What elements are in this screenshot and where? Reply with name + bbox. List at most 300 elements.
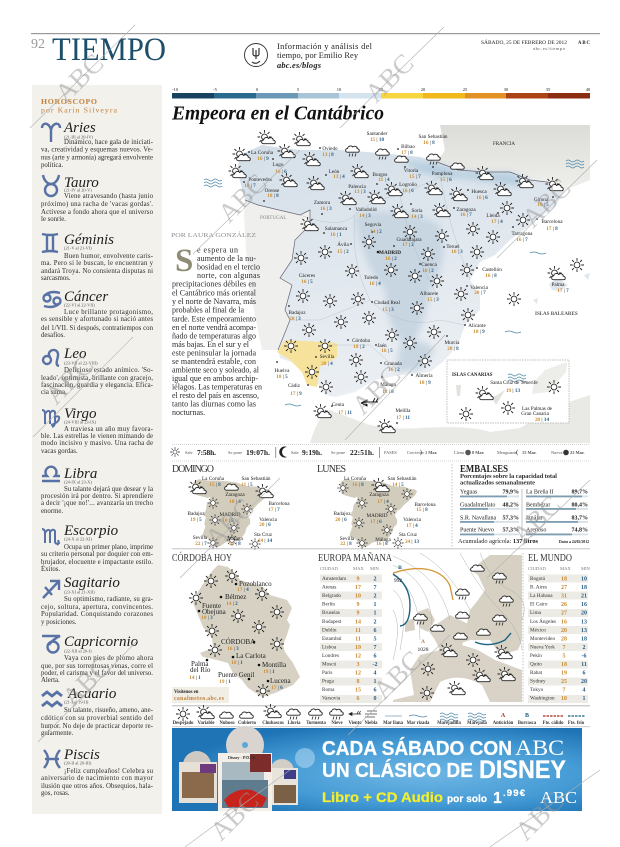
reservoir values: 57,3% — [502, 528, 519, 534]
watermarks: ABC: ABC — [346, 360, 407, 420]
table: world cities: Rabat — [530, 670, 543, 676]
panel: Sunday forecast: 21 | 8 — [229, 541, 241, 547]
sign: Virgo: vacas gordas. — [41, 448, 78, 455]
white sea cuts — [430, 678, 490, 702]
panel: Sunday forecast: DOMINGO — [172, 464, 214, 475]
sun, moon and phases strip: 9:19h. — [302, 448, 322, 457]
city labels and temperatures: Girona — [534, 197, 549, 203]
sign: Escorpio: brujador, elocuente e impactante estilo. — [41, 559, 153, 566]
sign: Leo — [41, 346, 154, 396]
reservoir values: Bembézar — [526, 502, 550, 508]
advertisement: Disney — [172, 726, 582, 811]
reservoir values: 48,2% — [502, 502, 519, 508]
sign: Sagitario: Popularidad. Conquistando corazones — [41, 611, 153, 618]
town labels: 16 | 3 — [227, 646, 239, 652]
city labels and temperatures: 16 | 2 — [422, 268, 434, 274]
city labels and temperatures: 20 | 7 — [474, 290, 486, 296]
legend — [173, 704, 585, 726]
temperature scale: -5 — [213, 87, 218, 92]
city labels and temperatures: Ceuta — [332, 402, 345, 408]
ad headline line 1: CADA SÁBADO CON — [322, 737, 512, 760]
borders — [245, 200, 310, 350]
sun, moon and phases strip: 22 Mar. — [570, 450, 584, 455]
legend labels: Cubierto — [238, 721, 257, 726]
sign: Escorpio — [41, 523, 154, 573]
temperature scale: 0 — [256, 87, 259, 92]
city labels and temperatures: 18 | 8 — [382, 389, 394, 395]
city labels and temperatures: 16 | 6 — [402, 188, 414, 194]
panel: Monday forecast: Sevilla — [340, 536, 355, 542]
sign: Libra: Su talante dejará que desear y la — [64, 486, 153, 493]
panel: Monday forecast: Zaragoza — [369, 492, 389, 498]
reservoir values: Arenoso — [526, 528, 546, 534]
table: Europe cities: Berlín — [322, 602, 335, 608]
city labels and temperatures: 14 | 3 — [359, 213, 371, 219]
panel: Córdoba today — [172, 552, 300, 703]
sign: Escorpio: (24-X al 22-XI) — [64, 536, 92, 542]
table: world cities: Bogotá — [530, 576, 546, 582]
islands: Baleares — [533, 273, 590, 304]
table: Europe cities: 10 — [355, 594, 361, 600]
arrow: wind — [361, 398, 378, 406]
table: world cities: 5 — [562, 654, 566, 660]
sign: Tauro: (21-IV al 20-V) — [64, 188, 92, 192]
callout: canalmeteo: Visítenos en — [174, 690, 199, 695]
sign: Aries: (21-III al 20-IV) — [64, 134, 94, 140]
city labels and temperatures: 15 | 3 — [382, 307, 394, 313]
sign: Libra — [41, 466, 154, 515]
sign: Cáncer: (22-VI al 22-VII) — [64, 302, 95, 308]
article text: el Cantábrico más oriental — [172, 288, 257, 298]
legend labels: Marejadilla — [437, 721, 461, 726]
title: TIEMPO — [52, 32, 166, 68]
article text: el resto del país en ascenso, — [172, 391, 259, 400]
table: world cities: -6 — [582, 654, 586, 660]
table: Europe cities: 12 — [355, 654, 361, 660]
table: Europe cities: MAX — [353, 566, 364, 571]
sign: Libra: Libra — [63, 466, 97, 482]
sign: Aries: Aries — [63, 120, 96, 136]
table: Europe cities: 5 — [374, 636, 376, 642]
table: Europe cities: Bruselas — [322, 610, 340, 616]
sign: Tauro: le sonríe. — [41, 216, 66, 223]
city labels and temperatures: Córdoba — [352, 338, 371, 344]
table: Europe cities: 14 — [355, 620, 361, 626]
sign: Acuario: Su talante, risueño, ameno, ane- — [64, 707, 154, 714]
table: Europe cities: Amsterdam — [322, 576, 346, 582]
sign: Virgo: modo incisivo y masivo. Una racha de — [41, 440, 153, 447]
map: Spain Sunday — [193, 479, 270, 547]
watermarks: ABC: ABC — [516, 173, 577, 233]
table: Europe cities: Budapest — [322, 619, 342, 625]
article text: se mantendrá estable, con — [172, 357, 256, 366]
table: world cities: El Cairo — [530, 602, 548, 608]
ad offer line: .99€ — [503, 788, 526, 799]
city labels and temperatures: Pamplona — [432, 171, 453, 177]
sign: Tauro: próximo) una racha de 'vacas gordas'. — [41, 201, 153, 208]
article text: tanto las diurnas como las — [172, 400, 256, 408]
panel: Sunday forecast: La Coruña — [202, 476, 225, 482]
date line: abc.es/tiempo — [533, 46, 566, 51]
sign: Capricornio: Capricornio — [64, 634, 139, 650]
sign: Piscis: ¡Feliz cumpleaños! Celebra su — [64, 768, 154, 775]
sign: Géminis: sarcasmos. — [41, 275, 71, 282]
cold fronts — [393, 574, 511, 645]
blog promo text: Información y análisis del — [277, 42, 373, 51]
table: Europe cities: 19 — [355, 645, 361, 651]
sign: Capricornio — [41, 634, 153, 684]
ad offer line: ABC — [540, 788, 577, 807]
table: world cities: 27 — [561, 610, 567, 616]
town labels: Palma — [191, 660, 209, 668]
table: world cities: 1 — [582, 696, 586, 702]
legend labels: Anticiclón — [493, 721, 514, 726]
city labels and temperatures: 16 | 3 — [451, 249, 463, 255]
sign: Acuario: Acuario — [67, 686, 117, 702]
city labels and temperatures: 15 | 2 — [337, 249, 349, 255]
table: world cities: México — [530, 628, 546, 634]
city labels and temperatures: Málaga — [380, 382, 396, 388]
city labels and temperatures: 16 | 6 — [275, 169, 287, 175]
table: world cities: Tokyo — [530, 687, 544, 693]
panel: world cities — [523, 553, 591, 703]
panel: Monday forecast: MADRID — [366, 513, 388, 519]
table: world cities: 18 — [561, 662, 567, 668]
table: world cities: 20 — [581, 679, 587, 685]
accumulated note — [458, 538, 589, 545]
sign: Piscis — [41, 747, 154, 797]
table: world cities: 16 — [561, 620, 567, 626]
article text: norte, con algunas — [197, 271, 260, 280]
sign: Piscis: (20-II al 20-III) — [64, 760, 92, 766]
city labels and temperatures: Murcia — [445, 340, 460, 346]
table: Europe cities: 15 — [355, 688, 361, 694]
city labels and temperatures: 16 | 4 — [369, 281, 381, 287]
weather icons — [414, 565, 515, 700]
city labels and temperatures: 16 | 5 — [381, 348, 393, 354]
sign: Leo: cia suma. — [41, 389, 67, 396]
table: world cities: 20 — [581, 610, 587, 616]
town labels: Puente Genil — [218, 671, 254, 679]
watermarks: ABC: ABC — [506, 490, 567, 550]
panel: Europe tomorrow — [318, 552, 524, 703]
temperature scale: 5 — [297, 87, 300, 92]
city labels and temperatures: 19 | 13 — [506, 388, 520, 394]
city labels and temperatures: 15 | 3 — [427, 297, 439, 303]
legend labels: Viento — [348, 721, 362, 726]
article text: precipitaciones débiles en — [172, 280, 256, 288]
table: world cities: Nueva York — [530, 644, 555, 650]
table: world cities: 13 — [581, 620, 587, 626]
table: world cities: 6 — [582, 670, 586, 676]
table: world cities: B. Aires — [530, 584, 547, 590]
town labels: 19 | 1 — [263, 669, 275, 675]
sun, moon and phases strip: Menguante — [497, 450, 517, 455]
panel: horoscope — [32, 85, 162, 814]
city labels and temperatures: Sevilla — [320, 354, 335, 360]
ad offer line — [322, 788, 577, 807]
date line: SÁBADO, 25 DE FEBRERO DE 2012 — [481, 40, 568, 46]
reservoir values: Puente Nuevo — [460, 528, 494, 534]
city labels and temperatures: Teruel — [446, 244, 460, 250]
table: world cities: 13 — [581, 628, 587, 634]
table: Europe cities: Atenas — [322, 584, 336, 590]
city labels and temperatures: Albacete — [420, 291, 439, 297]
sun, moon and phases strip: 19:07h. — [246, 448, 270, 457]
ad headline line 2: DISNEY — [479, 756, 566, 784]
table: world cities: 7 — [562, 688, 566, 694]
sun, moon and phases strip: 15 Mar. — [522, 450, 536, 455]
panel: world cities: EL MUNDO — [528, 553, 572, 564]
panel: Monday forecast: La Coruña — [344, 476, 367, 482]
city labels and temperatures: 17 | 9 — [290, 391, 302, 397]
town labels: La Carlota — [236, 652, 267, 660]
panel: Sunday forecast: 24 | 14 — [258, 538, 272, 544]
label: France, Portugal, Baleares: PORTUGAL — [260, 216, 286, 221]
subtitle: actualizados semanalmente — [460, 480, 535, 486]
panel: Sunday forecast: 19 | 5 — [190, 517, 202, 523]
city labels and temperatures: 20 | 3 — [289, 316, 301, 322]
legend icons — [176, 704, 585, 721]
reservoir values: Yeguas — [460, 490, 478, 496]
sign: Tauro: Tauro — [64, 175, 99, 191]
label: France, Portugal, Baleares: FRANCIA — [493, 142, 515, 147]
city labels and temperatures: Cáceres — [299, 273, 315, 279]
article text: igual que en ambos archip- — [172, 374, 258, 383]
city labels and temperatures: 18 | 9 — [473, 329, 485, 335]
city labels and temperatures: 16 | 6 — [476, 195, 488, 201]
city labels and temperatures: MADRID — [379, 250, 401, 256]
panel: Monday forecast: 17 | 4 — [377, 499, 389, 505]
sign: Piscis: gos, rosas. — [41, 790, 70, 797]
temperature scale — [172, 87, 591, 98]
panel: Monday forecast: 14 | 5 — [392, 482, 404, 488]
sun, moon and phases strip: Se pone — [228, 450, 242, 455]
table: world cities: Washington — [530, 696, 555, 702]
table: world cities: 10 — [581, 576, 587, 582]
sign: Géminis: (21-V al 21-VI) — [64, 246, 92, 250]
watermarks: ABC: ABC — [39, 350, 100, 410]
table: Europe cities: 7 — [374, 585, 376, 591]
table: world cities: MIN — [581, 566, 591, 571]
sign: Libra: a decir '¡que no!'... avanzaría un trecho — [41, 500, 154, 507]
pressure labels: A — [421, 639, 425, 645]
temperature scale: -10 — [172, 87, 179, 92]
table: world cities: Los Ángeles — [530, 617, 556, 625]
icons: sun — [284, 201, 584, 421]
sign: Libra: enorme. — [41, 508, 63, 515]
sign: Aries: va, creatividad y esquemas nuevos. Ve- — [41, 146, 154, 154]
city labels and temperatures: 17 | 4 — [491, 219, 503, 225]
temperature scale: 25 — [463, 87, 468, 92]
city labels and temperatures: Segovia — [365, 222, 382, 228]
reservoir values — [460, 490, 588, 534]
town labels: Bélmez — [225, 593, 246, 601]
city labels and temperatures: Huelva — [275, 368, 290, 374]
table: Europe cities: Estambul — [322, 636, 342, 642]
article byline: POR LAURA GONZÁLEZ — [171, 231, 256, 239]
table: Europe cities: 6 — [374, 688, 376, 694]
bars — [460, 489, 588, 537]
panel: Sunday forecast: Barcelona — [268, 501, 290, 507]
panel: Monday forecast: 22 | 8 — [340, 541, 352, 547]
table: Europe cities: 9 — [356, 602, 360, 608]
table: world cities: 28 — [561, 636, 567, 642]
sign: Sagitario: cejo, soltura, apertura, convincentes. — [41, 604, 153, 611]
heading: horoscope: HOROSCOPO — [41, 97, 97, 106]
reservoir values: 79,9% — [502, 490, 519, 496]
table: Europe cities: 6 — [356, 696, 360, 702]
city labels and temperatures: Almería — [416, 373, 433, 379]
city labels and temperatures: León — [329, 169, 340, 175]
sign: Leo: Delicioso estado anímico. 'So- — [64, 367, 154, 374]
city labels and temperatures: Cádiz — [288, 383, 301, 389]
city labels and temperatures: Lleida — [486, 213, 500, 219]
sign: Piscis: Piscis — [63, 747, 100, 763]
sign: Tauro: Viene atravesando (hasta junio — [64, 193, 154, 200]
sign: Escorpio: Ocupa un primer plano, imprime — [64, 544, 153, 551]
sun, moon and phases strip: 7:58h. — [197, 448, 216, 457]
table: Europe cities: Lisboa — [322, 644, 337, 650]
table: Europe cities: Dublín — [322, 628, 337, 634]
city labels and temperatures: 16 | 8 — [423, 140, 435, 146]
city labels and temperatures: 16 | 2 — [388, 367, 400, 373]
sign: Géminis: Buen humor, envolvente caris- — [64, 253, 154, 260]
table: world cities: 7 — [562, 645, 566, 651]
panel: Monday forecast: LUNES — [317, 464, 346, 475]
sign: Sagitario — [41, 575, 154, 626]
town labels — [189, 580, 291, 691]
city labels and temperatures: Oviedo — [322, 146, 338, 152]
table: Europe cities: Londres — [322, 653, 339, 659]
city labels and temperatures: 17 | 11 — [396, 415, 410, 421]
panel: Monday forecast: 15 | 8 — [416, 507, 428, 513]
sun, moon and phases strip: 1 Mar. — [425, 450, 437, 455]
city labels and temperatures: 16 | 7 — [460, 212, 472, 218]
table: Europe cities: Moscú — [322, 662, 337, 668]
pressure labels: B — [398, 565, 402, 571]
sign: Virgo: Virgo — [64, 406, 97, 422]
table: Europe cities: 1 — [374, 679, 376, 685]
table: Europe cities: Belgrado — [322, 593, 341, 599]
sign: Cáncer — [41, 289, 154, 339]
article text: tarde. Este empeoramiento — [172, 314, 256, 324]
town labels: 14 | 1 — [189, 675, 201, 681]
heading: Embalses: EMBALSES — [460, 464, 508, 475]
table: world cities: 18 — [581, 585, 587, 591]
table: Europe cities: París — [322, 670, 332, 676]
sign: Leo: leado', optimista, brillante con gracejo, — [41, 375, 153, 382]
sign: Capricornio: Vaya con pies de plomo ahora — [64, 655, 153, 662]
city labels and temperatures: 16 | 5 — [301, 279, 313, 285]
reservoir values: 80,4% — [572, 502, 588, 508]
city labels and temperatures: 16 | 8 — [485, 273, 497, 279]
table: world cities — [528, 566, 591, 703]
table: Europe cities: 2 — [374, 594, 376, 600]
sign: Acuario: cdótico con su proverbial sentido del — [41, 715, 153, 722]
map: Europe fronts — [393, 553, 524, 702]
town labels: CÓRDOBA — [221, 638, 255, 646]
icon: Emilio Rey blog — [244, 44, 268, 66]
legend labels: Borrasca — [518, 721, 537, 726]
city labels and temperatures: Santa Cruz de Tenerife — [490, 379, 538, 386]
sign: Virgo: ble. Las estrellas le vienen mimando de — [41, 433, 153, 440]
sign: Acuario: (21-I al 19-II) — [64, 700, 89, 704]
city labels and temperatures: Vitoria — [404, 168, 419, 174]
city labels and temperatures: 18 | 8 — [267, 193, 279, 199]
watermarks: ABC: ABC — [509, 786, 570, 846]
table: world cities: Quito — [530, 662, 542, 668]
city labels and temperatures: 18 | 5 — [276, 374, 288, 380]
sign: Sagitario: (23-XI al 21-XII) — [64, 590, 95, 594]
city labels and temperatures: La Coruña — [251, 150, 274, 156]
map: Spain Monday — [340, 479, 417, 547]
legend labels — [173, 721, 585, 726]
panel: Canary Islands inset: ISLAS CANARIAS — [452, 373, 493, 378]
table: world cities: 21 — [581, 594, 587, 600]
city labels and temperatures: 16 | 2 — [385, 256, 397, 262]
sun, moon and phases strip: Nueva — [551, 450, 563, 455]
city labels and temperatures: 15 | 6 — [440, 177, 452, 183]
town labels: 17 | 4 — [237, 587, 249, 593]
sign: Libra: (24-IX al 23-X) — [64, 480, 92, 484]
sun, moon and phases strip: Creciente — [407, 450, 424, 455]
pressure labels: 992 — [394, 578, 402, 584]
headline: Empeora en el Cantábrico — [171, 104, 384, 124]
panel: Monday forecast: 17 | 6 — [370, 519, 382, 525]
city labels and temperatures: 20 | 14 — [535, 417, 549, 423]
sun, moon and phases strip: Llena — [454, 450, 464, 455]
sign: Cáncer: Cáncer — [64, 289, 108, 305]
town labels: Pozoblanco — [239, 580, 272, 588]
subtitle — [460, 473, 557, 486]
city labels and temperatures: Pontevedra — [248, 177, 272, 183]
ad offer line: Libro + CD Audio — [322, 789, 443, 805]
city labels and temperatures: 11 | 4 — [378, 177, 390, 183]
article text: ñado de temperaturas algo — [172, 332, 256, 340]
pressure labels — [394, 565, 429, 653]
temperature scale: 20 — [421, 87, 426, 92]
city labels and temperatures: 16 | 5 — [537, 202, 549, 208]
town labels: del Río — [190, 666, 211, 674]
city labels and temperatures: 16 | 9 — [257, 156, 269, 162]
city labels and temperatures: 16 | 3 — [320, 206, 332, 212]
table: world cities: 11 — [581, 662, 587, 668]
ad headline line 2: UN CLÁSICO DE — [322, 759, 473, 782]
watermarks: ABC: ABC — [199, 493, 260, 553]
reservoir values: 57,3% — [502, 516, 519, 522]
panel: Monday forecast: Málaga — [375, 537, 391, 543]
sign: Libra: procesión irá por dentro. Si aprendiere — [41, 493, 153, 500]
date line: ABC — [578, 41, 591, 46]
town labels: Fuente — [202, 602, 221, 610]
accumulated note: Datos a 24/02/2012 — [559, 540, 589, 544]
article text: en el norte vendrá acompa- — [172, 323, 256, 332]
table: world cities: MAX — [560, 566, 571, 571]
town labels: 19 | 1 — [219, 679, 231, 685]
city labels and temperatures: Orense — [265, 188, 280, 194]
table: Europe cities: 7 — [374, 645, 376, 651]
subtitle: Porcentajes sobre la capacidad total — [460, 473, 557, 480]
ad offer line: por solo — [447, 794, 487, 805]
city labels and temperatures: 16 | 7 — [516, 237, 528, 243]
sun, moon and phases strip: FASES — [384, 450, 397, 455]
sign: Sagitario: y posiciones. — [41, 619, 77, 626]
city labels and temperatures: Toledo — [364, 275, 379, 281]
city labels and temperatures: 20 | 4 — [321, 361, 333, 367]
table: Europe cities: 9 — [356, 576, 360, 582]
table: world cities: 18 — [561, 576, 567, 582]
